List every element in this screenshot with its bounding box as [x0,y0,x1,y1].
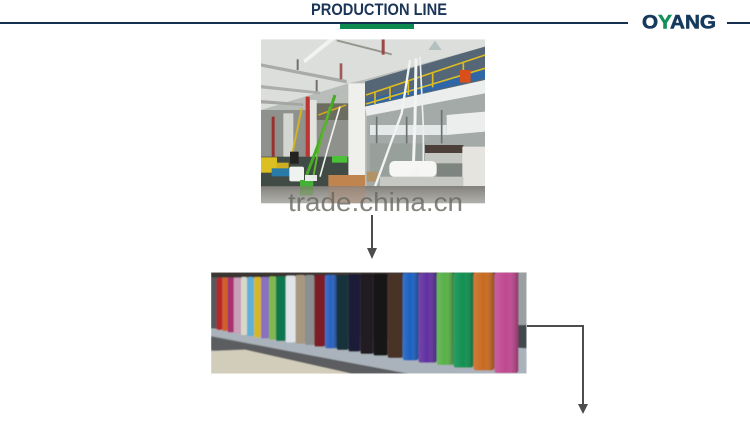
arrow: photo to rolls [367,215,377,259]
header rule left [0,22,628,24]
watermark band [260,186,487,203]
photo: coloured fabric rolls [211,272,527,374]
arrow: rolls to next step [527,326,588,414]
watermark text: trade.china.cn [288,187,463,217]
title: PRODUCTION LINE [311,0,447,19]
logo: OYANG [642,12,716,34]
green title accent bar [340,24,414,29]
photo: factory production line [260,39,487,203]
header rule right [727,22,750,24]
